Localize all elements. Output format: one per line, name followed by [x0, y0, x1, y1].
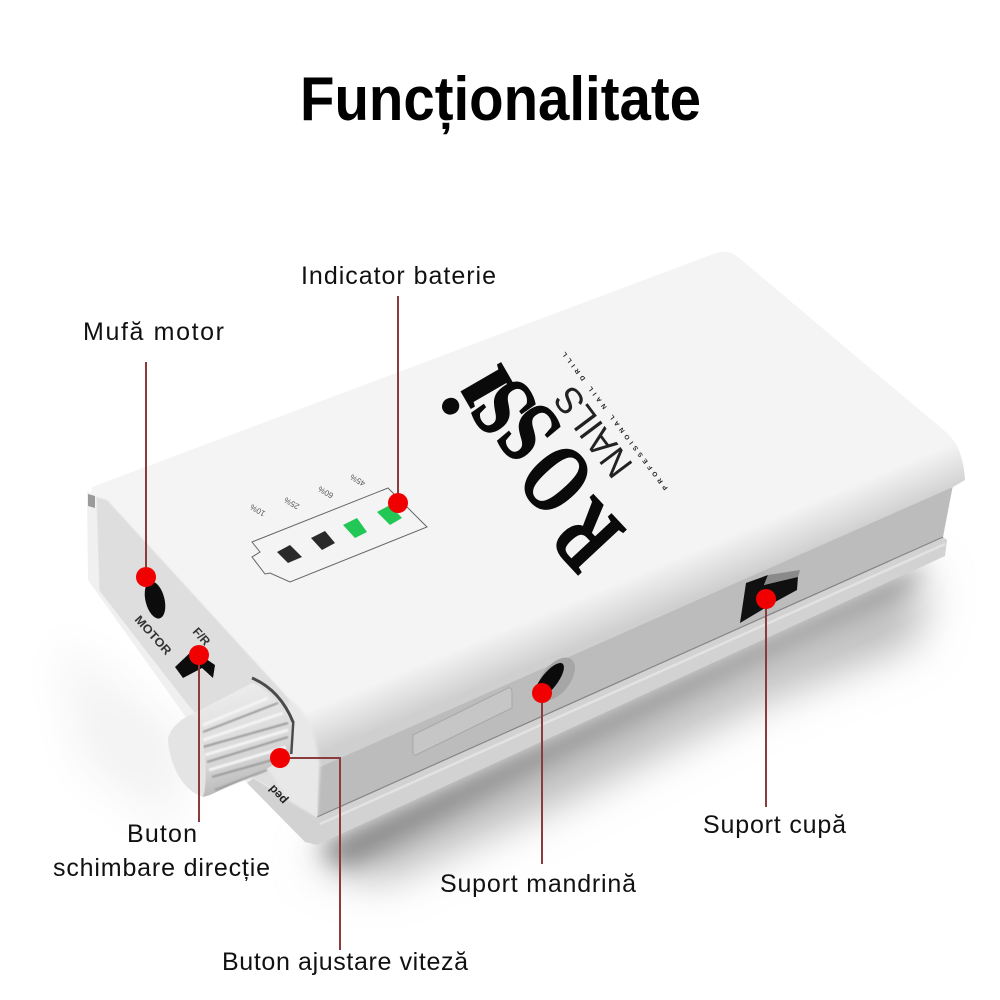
shell top and bevel [90, 252, 965, 767]
recessed side panel [317, 485, 953, 817]
brand logo: O [497, 423, 615, 536]
brand logo: NAILS [546, 378, 641, 485]
callout dots [136, 493, 776, 768]
brand logo: PROFESSIONAL NAIL DRILL [561, 350, 670, 491]
cup holder slot [740, 570, 800, 623]
brand logo: S [449, 362, 556, 453]
battery indicator: 45% [349, 472, 367, 488]
front face [87, 491, 320, 817]
label: direction button: Buton [127, 820, 197, 848]
brand logo: S [476, 385, 580, 481]
brand logo: R [529, 479, 643, 591]
device photo [60, 252, 965, 880]
battery indicator [249, 472, 427, 582]
label: cup holder: Suport cupă [703, 811, 846, 839]
label: direction button [53, 820, 270, 882]
bottom lip [247, 537, 947, 845]
motor socket [141, 579, 169, 621]
brand logo [420, 350, 670, 591]
side plate [413, 688, 512, 755]
direction label: F/R [190, 625, 213, 649]
label: direction button: schimbare direcție [53, 854, 270, 882]
title: Funcționalitate [300, 65, 701, 134]
battery indicator: 10% [249, 502, 267, 518]
callout lines [146, 296, 766, 950]
label: speed knob: Buton ajustare viteză [222, 948, 468, 976]
motor label: MOTOR [132, 613, 175, 658]
cast shadow [60, 562, 930, 880]
direction switch [175, 650, 215, 678]
knob cap [168, 715, 206, 797]
label: battery indicator: Indicator baterie [301, 262, 496, 290]
seam [317, 537, 943, 817]
label: mandrel holder: Suport mandrină [440, 870, 636, 898]
speed knob [168, 678, 293, 797]
speed label: ped [266, 782, 290, 807]
mandrel holder hole [529, 651, 582, 707]
label: motor socket: Mufă motor [83, 318, 224, 346]
battery indicator: 60% [317, 484, 335, 500]
battery indicator: 25% [283, 495, 301, 511]
brand logo: i [420, 350, 534, 432]
